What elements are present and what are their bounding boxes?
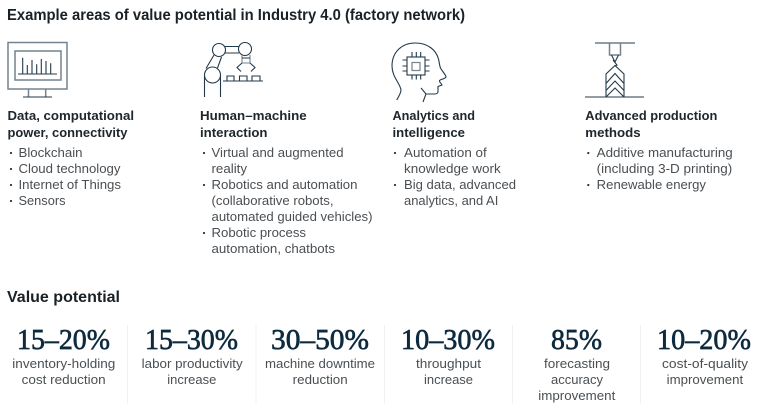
stat: inventory-holding cost reduction: 15–20% [17,324,110,356]
stat: machine downtime reduction [265,324,375,387]
bullet list: human-machine technologies: Robotic process [212,226,306,240]
bullet list: human-machine technologies: reality [212,162,248,176]
bullet list: analytics technologies: Automation of [404,146,487,160]
stat: forecasting accuracy improvement: accuracy [551,373,604,387]
bullet list: human-machine technologies [203,146,372,256]
heading: value potential: Value potential [7,289,120,306]
stat: forecasting accuracy improvement: forecasting [544,357,610,371]
stat: inventory-holding cost reduction: inventory-holding [12,357,115,371]
heading: human-machine interaction: Human–machine [200,109,307,123]
bullet list: analytics technologies: analytics, and AI [404,194,498,208]
bullet list: data technologies: Blockchain [18,146,82,160]
bullet list: production technologies: (including 3-D printing) [597,162,732,176]
bullet list: human-machine technologies: Virtual and augmented [212,146,344,160]
stat: machine downtime reduction: 30–50% [271,324,369,356]
bullet list: human-machine technologies: automation, chatbots [212,242,335,256]
stat: labor productivity increase: labor productivity [142,357,243,371]
stat: forecasting accuracy improvement: improvement [538,389,616,403]
stat: throughput increase: throughput [416,357,482,371]
bullet list: data technologies: Sensors [18,194,66,208]
stat: labor productivity increase: increase [167,373,216,387]
stat: cost-of-quality improvement [657,324,751,387]
bullet list: production technologies [587,146,733,192]
bullet list: analytics technologies: knowledge work [404,162,501,176]
stat: inventory-holding cost reduction [12,324,115,387]
heading: analytics and intelligence [392,109,475,140]
stat: throughput increase [401,324,495,387]
heading: advanced production methods: Advanced production [585,109,717,123]
stat: throughput increase: 10–30% [401,324,495,356]
icon: 3-D printer nozzle [585,43,644,97]
panel: data, computational power, connectivity [8,42,134,208]
bullet list: data technologies: Internet of Things [18,178,121,192]
panel: advanced production methods [585,43,733,192]
heading: analytics and intelligence: intelligence [392,126,465,140]
bullet list: analytics technologies: Big data, advanced [404,178,516,192]
heading: human-machine interaction: interaction [200,126,268,140]
icon: monitor with bar chart [8,42,67,97]
heading: data, computational power, connectivity: power, connectivity [8,126,127,140]
stat: forecasting accuracy improvement [538,324,616,403]
stat: cost-of-quality improvement: improvement [667,373,744,387]
panel: analytics and intelligence [392,43,516,208]
bullet list: data technologies: Cloud technology [18,162,121,176]
stat: labor productivity increase [142,324,243,387]
stat: forecasting accuracy improvement: 85% [551,324,602,356]
stat: machine downtime reduction: reduction [293,373,348,387]
stat: cost-of-quality improvement: 10–20% [657,324,751,356]
bullet list: analytics technologies [394,146,516,208]
bullet list: human-machine technologies: automated guided vehicles) [212,210,372,224]
stat: machine downtime reduction: machine downtime [265,357,375,371]
stat: labor productivity increase: 15–30% [145,324,238,356]
icon: robot arm over conveyor [204,42,263,97]
heading: human-machine interaction [200,109,307,140]
stat: cost-of-quality improvement: cost-of-quality [662,357,749,371]
bullet list: production technologies: Renewable energy [597,178,707,192]
heading: analytics and intelligence: Analytics and [392,109,475,123]
stat: inventory-holding cost reduction: cost reduction [22,373,106,387]
bullet list: production technologies: Additive manufacturing [597,146,733,160]
bullet list: human-machine technologies: (collaborative robots, [212,194,334,208]
bullet list: data technologies [10,146,121,208]
heading: data, computational power, connectivity: Data, computational [8,109,134,123]
title: Example areas of value potential in Industry 4.0 (factory network) [7,7,465,24]
heading: data, computational power, connectivity [8,109,134,140]
heading: advanced production methods [585,109,717,140]
heading: advanced production methods: methods [585,126,641,140]
panel: human-machine interaction [200,42,372,256]
stat: throughput increase: increase [424,373,473,387]
bullet list: human-machine technologies: Robotics and automation [212,178,358,192]
icon: head with microchip [392,43,446,102]
